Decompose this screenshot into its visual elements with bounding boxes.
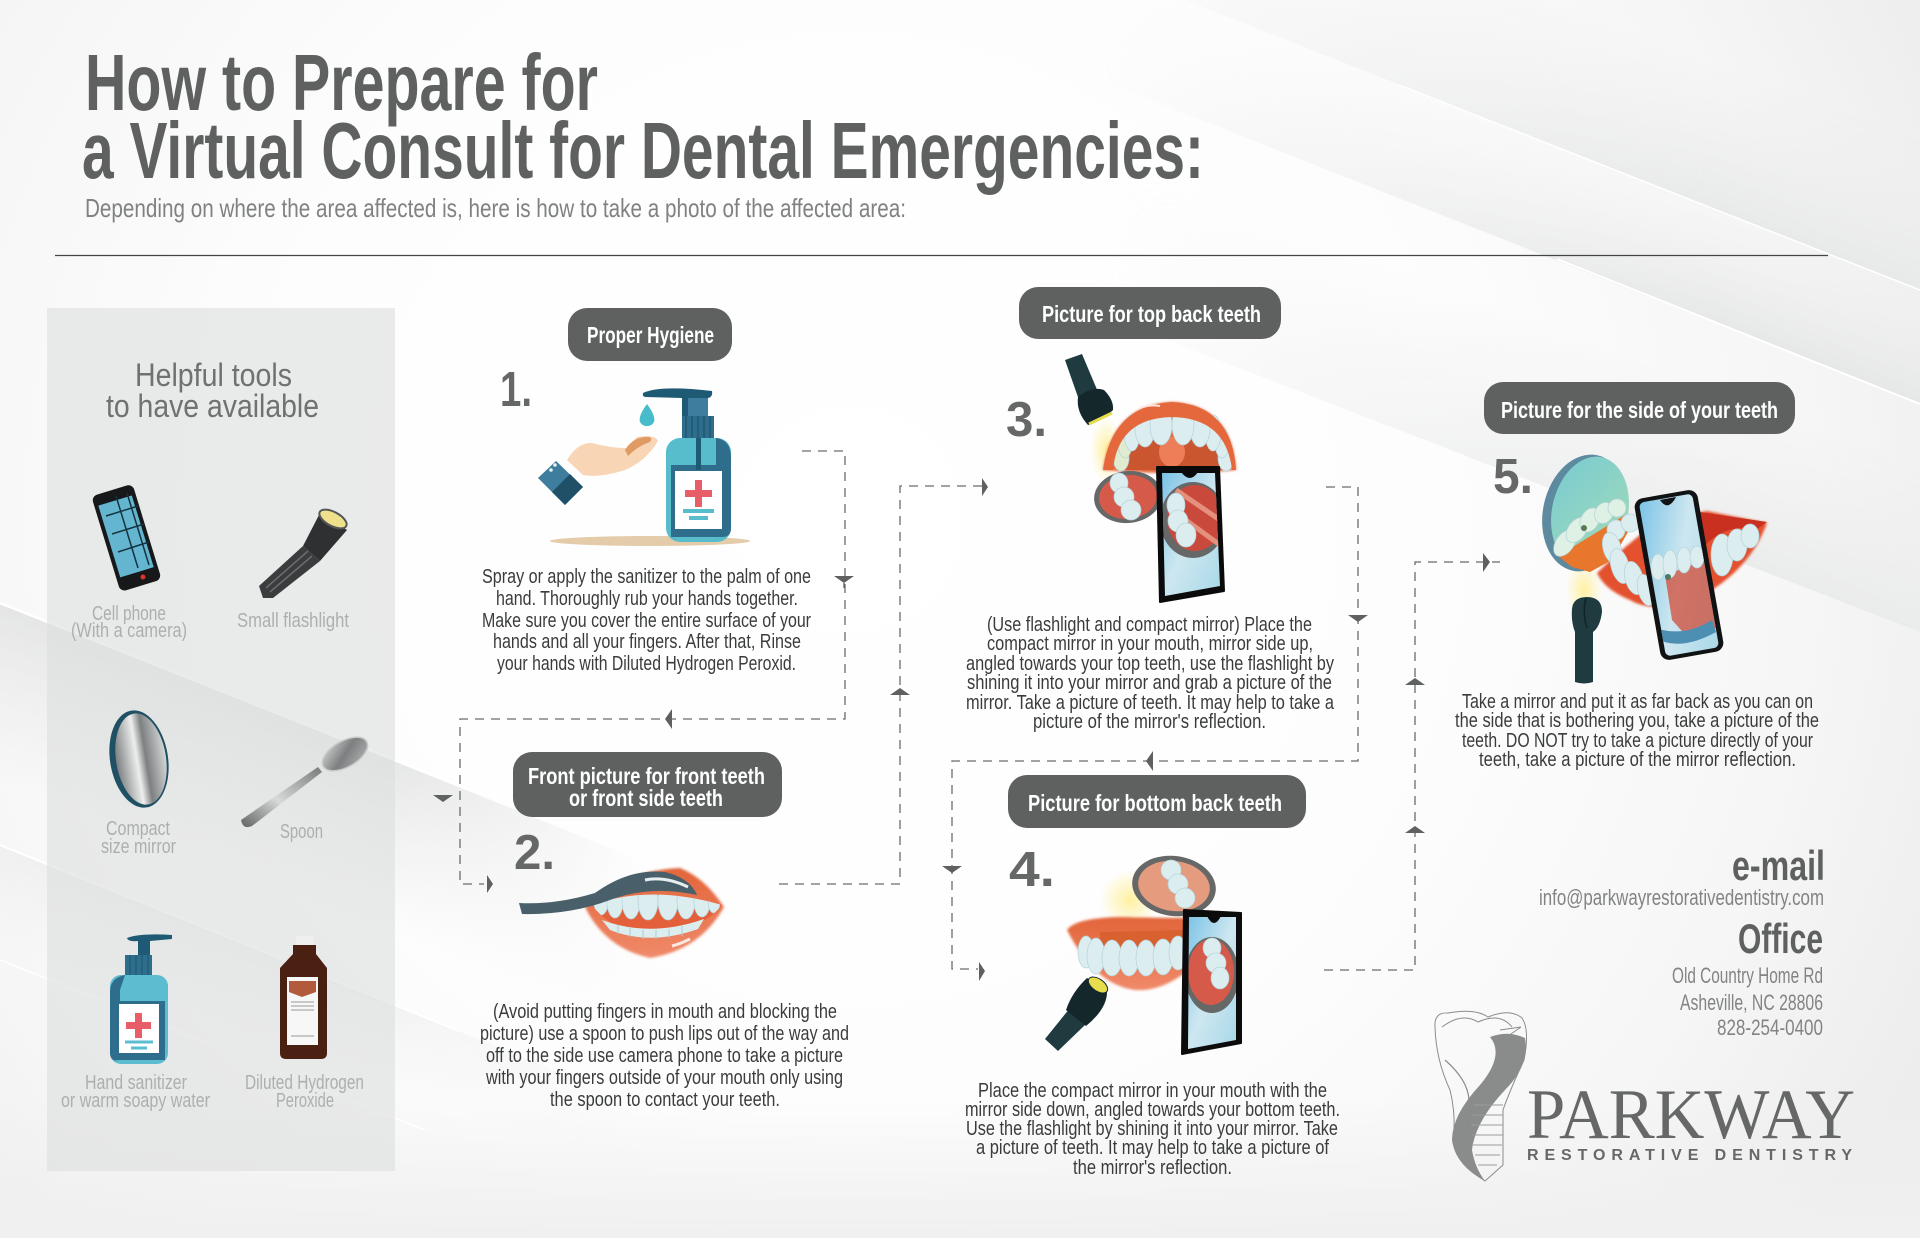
step 5: side teeth: [1455, 382, 1819, 771]
panel heading: to have available: [106, 388, 319, 424]
heading pill: or front side teeth: [569, 785, 723, 811]
body text: Place the compact mirror in your mouth with the: [978, 1080, 1327, 1102]
connector: step 2 to step 3: [779, 478, 988, 884]
illustration: side teeth with mirror and phone: [1532, 447, 1767, 684]
icon: cell phone: [91, 484, 162, 592]
illustration: top teeth with mirror and phone: [1065, 354, 1236, 602]
heading pill: Picture for the side of your teeth: [1501, 397, 1778, 423]
contact details: Old Country Home Rd: [1672, 963, 1823, 988]
label: [245, 1072, 364, 1112]
body text: [482, 566, 811, 675]
icon: flashlight: [259, 506, 350, 598]
body text: (Avoid putting fingers in mouth and blocking the: [493, 1001, 837, 1023]
body text: [1455, 691, 1819, 771]
label: [71, 603, 187, 642]
number: 5.: [1493, 450, 1533, 504]
body text: shining it into your mirror and grab a picture of the: [967, 672, 1332, 694]
body text: with your fingers outside of your mouth only using: [485, 1067, 843, 1089]
illustration: hand and sanitizer: [538, 388, 750, 546]
number: 3.: [1006, 393, 1047, 447]
body text: the spoon to contact your teeth.: [550, 1089, 780, 1111]
step 3: top back teeth: [966, 287, 1335, 733]
body text: [966, 614, 1335, 733]
contact details: e-mail: [1732, 842, 1825, 889]
label: Peroxide: [276, 1090, 334, 1112]
heading pill: [1008, 775, 1306, 828]
contact details: Office: [1738, 915, 1823, 962]
panel: helpful tools: [47, 308, 395, 1171]
heading pill: [513, 752, 782, 817]
contact details: 828-254-0400: [1717, 1015, 1823, 1040]
heading pill: Front picture for front teeth: [528, 763, 765, 789]
step 4: bottom back teeth: [965, 775, 1340, 1179]
connector: step 3 to step 4: [942, 487, 1368, 981]
label: [61, 1072, 210, 1112]
title: [82, 38, 1204, 195]
label: [101, 818, 176, 858]
body text: (Use flashlight and compact mirror) Place the: [987, 614, 1312, 636]
heading pill: Picture for top back teeth: [1042, 301, 1261, 327]
body text: angled towards your top teeth, use the flashlight by: [966, 653, 1334, 675]
icon: spoon: [241, 730, 373, 827]
label: Compact: [106, 818, 170, 840]
step 1: proper hygiene: [482, 308, 811, 675]
body text: teeth, take a picture of the mirror reflection.: [1479, 749, 1796, 771]
connector: step 1 to step 2: [433, 451, 854, 893]
body text: [965, 1080, 1340, 1179]
icon: hydrogen peroxide bottle: [280, 936, 327, 1059]
body text: picture) use a spoon to push lips out of the way and: [480, 1023, 849, 1045]
number: 1.: [500, 363, 532, 417]
panel heading: [106, 357, 319, 424]
label: Diluted Hydrogen: [245, 1072, 364, 1094]
body text: mirror. Take a picture of teeth. It may help to take a: [966, 692, 1335, 714]
label: Cell phone: [92, 603, 166, 625]
body text: off to the side use camera phone to take a picture: [486, 1045, 843, 1067]
contact details: [1539, 842, 1825, 1040]
heading pill: Proper Hygiene: [587, 322, 714, 348]
subtitle: Depending on where the area affected is, here is how to take a photo of the affected area:: [85, 193, 906, 223]
body text: the side that is bothering you, take a picture of the: [1455, 710, 1819, 732]
title: a Virtual Consult for Dental Emergencies:: [82, 106, 1204, 195]
body text: teeth. DO NOT try to take a picture directly of your: [1462, 730, 1813, 752]
icon: compact mirror: [103, 706, 175, 812]
logo wordmark: PARKWAY: [1527, 1076, 1855, 1154]
logo icon: tooth implant: [1435, 1011, 1527, 1181]
body text: your hands with Diluted Hydrogen Peroxid.: [497, 653, 796, 675]
heading pill: [1484, 382, 1795, 434]
body text: the mirror's reflection.: [1073, 1157, 1232, 1179]
heading pill: [568, 308, 732, 361]
label: Hand sanitizer: [85, 1072, 187, 1094]
contact details: info@parkwayrestorativedentistry.com: [1539, 885, 1824, 910]
label: or warm soapy water: [61, 1090, 210, 1112]
logo: Parkway Restorative Dentistry: [1435, 1011, 1855, 1181]
icon: hand sanitizer: [110, 934, 172, 1064]
body text: compact mirror in your mouth, mirror side up,: [987, 633, 1313, 655]
illustration: bottom teeth with mirror and phone: [1045, 850, 1241, 1054]
label: (With a camera): [71, 620, 187, 642]
body text: mirror side down, angled towards your bottom teeth.: [965, 1099, 1340, 1121]
body text: hands and all your fingers. After that, Rinse: [493, 631, 801, 653]
body text: Take a mirror and put it as far back as you can on: [1462, 691, 1813, 713]
step 2: front teeth: [480, 752, 849, 1111]
heading pill: [1019, 287, 1281, 339]
body text: a picture of teeth. It may help to take a picture of: [976, 1137, 1329, 1159]
number: 4.: [1009, 843, 1055, 897]
label: size mirror: [101, 836, 176, 858]
illustration: spoon pushing lips: [519, 868, 724, 958]
body text: Spray or apply the sanitizer to the palm of one: [482, 566, 811, 588]
panel heading: Helpful tools: [135, 357, 292, 393]
contact details: Asheville, NC 28806: [1680, 990, 1823, 1015]
number: 2.: [514, 826, 555, 880]
body text: picture of the mirror's reflection.: [1033, 711, 1266, 733]
title: How to Prepare for: [85, 38, 598, 127]
connector: step 4 to step 5: [1324, 553, 1500, 970]
label: Small flashlight: [237, 610, 349, 632]
body text: Make sure you cover the entire surface of your: [482, 610, 811, 632]
logo tagline: RESTORATIVE DENTISTRY: [1527, 1147, 1852, 1164]
body text: Use the flashlight by shining it into your mirror. Take: [966, 1118, 1338, 1140]
body text: hand. Thoroughly rub your hands together.: [496, 588, 798, 610]
body text: [480, 1001, 849, 1111]
heading pill: Picture for bottom back teeth: [1028, 790, 1282, 816]
label: Spoon: [280, 821, 323, 843]
